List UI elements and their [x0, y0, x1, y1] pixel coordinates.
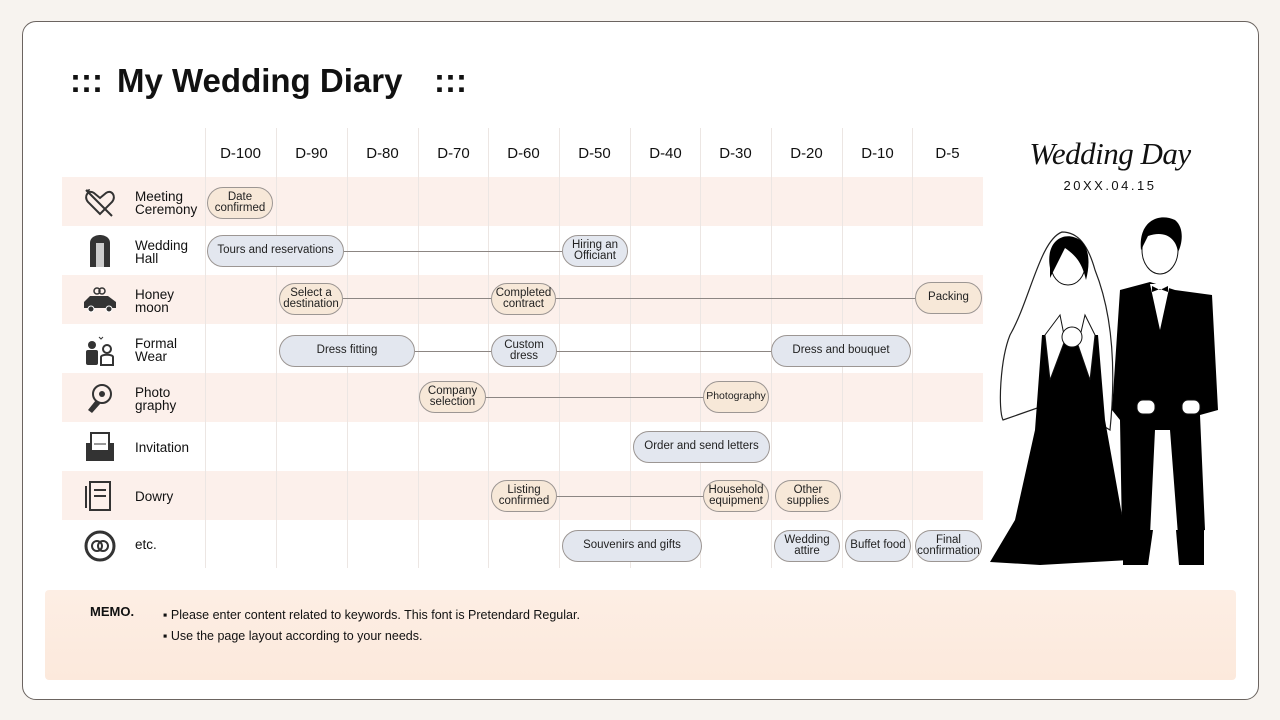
icon: car [84, 287, 116, 312]
timeline table: Dress and bouquet [792, 344, 890, 356]
timeline table: attire [794, 545, 820, 557]
connector lines [344, 251, 562, 252]
timeline table: equipment [709, 495, 763, 507]
timeline table: Buffet food [850, 539, 906, 551]
column headers: D-60 [507, 145, 540, 162]
timeline table: Wear [135, 349, 167, 364]
timeline table: Packing [928, 291, 969, 303]
column headers: D-70 [437, 145, 470, 162]
timeline table: Officiant [574, 250, 616, 262]
icon: heart arrow [85, 189, 115, 217]
row labels: Ceremony [135, 202, 197, 217]
icon: dowry list [85, 481, 111, 511]
timeline table: moon [135, 300, 169, 315]
icon: bouquet [88, 384, 112, 413]
timeline table: Select a [290, 286, 332, 298]
pills: Date [228, 190, 252, 202]
memo box: ▪ Please enter content related to keywords. This font is Pretendard Regular. [163, 608, 580, 622]
timeline table: Listing [507, 484, 541, 496]
timeline table: Order and send letters [644, 440, 759, 452]
timeline table: Formal [135, 336, 177, 351]
timeline table: destination [283, 298, 339, 310]
timeline table: Dress fitting [317, 344, 377, 356]
timeline table: Tours and reservations [217, 244, 334, 256]
icon: rings [84, 530, 116, 562]
icon: wedding hall [90, 235, 110, 267]
timeline table: Other [794, 484, 822, 496]
wedding day heading [1029, 136, 1192, 193]
timeline table: Photo [135, 385, 170, 400]
memo box: ▪ Use the page layout according to your needs. [163, 629, 422, 643]
row labels: Meeting [135, 189, 183, 204]
illustration: couple [990, 217, 1218, 565]
column headers [220, 145, 960, 162]
timeline table: supplies [787, 495, 829, 507]
timeline table: Household [708, 484, 763, 496]
timeline table: Wedding [135, 238, 188, 253]
memo box [45, 590, 1236, 680]
column headers: D-5 [935, 145, 960, 162]
column headers: D-50 [578, 145, 611, 162]
timeline table: Wedding [784, 534, 830, 546]
column headers: D-10 [861, 145, 894, 162]
timeline table: Final [936, 534, 961, 546]
timeline table: Completed [496, 286, 551, 298]
timeline table [62, 128, 983, 568]
column headers: D-20 [790, 145, 823, 162]
timeline table: selection [430, 396, 475, 408]
icon: letter [86, 432, 114, 461]
timeline table: Dowry [135, 489, 173, 504]
pills [207, 187, 273, 219]
timeline table: Invitation [135, 440, 189, 455]
column headers: D-90 [295, 145, 328, 162]
timeline table: confirmed [499, 495, 549, 507]
row labels [135, 189, 198, 217]
pills: confirmed [215, 202, 265, 214]
memo box: MEMO. [90, 604, 134, 619]
timeline table: confirmation [917, 545, 980, 557]
timeline table: Hall [135, 251, 158, 266]
title: ::: [70, 62, 103, 99]
column headers: D-100 [220, 145, 261, 162]
timeline table: Honey [135, 287, 174, 302]
timeline table: Company [428, 384, 477, 396]
timeline table: etc. [135, 537, 157, 552]
timeline table: Hiring an [572, 238, 618, 250]
timeline table: dress [510, 350, 538, 362]
timeline table: Souvenirs and gifts [583, 539, 681, 551]
column headers: D-40 [649, 145, 682, 162]
icon: couple [86, 336, 114, 366]
column headers: D-80 [366, 145, 399, 162]
timeline table: contract [503, 298, 544, 310]
title: My Wedding Diary [117, 62, 402, 99]
title: ::: [434, 62, 467, 99]
timeline table: Photography [706, 390, 766, 402]
timeline table: graphy [135, 398, 176, 413]
timeline table: Custom [504, 338, 544, 350]
wedding day heading: 20XX.04.15 [1064, 178, 1156, 193]
column headers: D-30 [719, 145, 752, 162]
wedding day heading: Wedding Day [1029, 136, 1191, 171]
